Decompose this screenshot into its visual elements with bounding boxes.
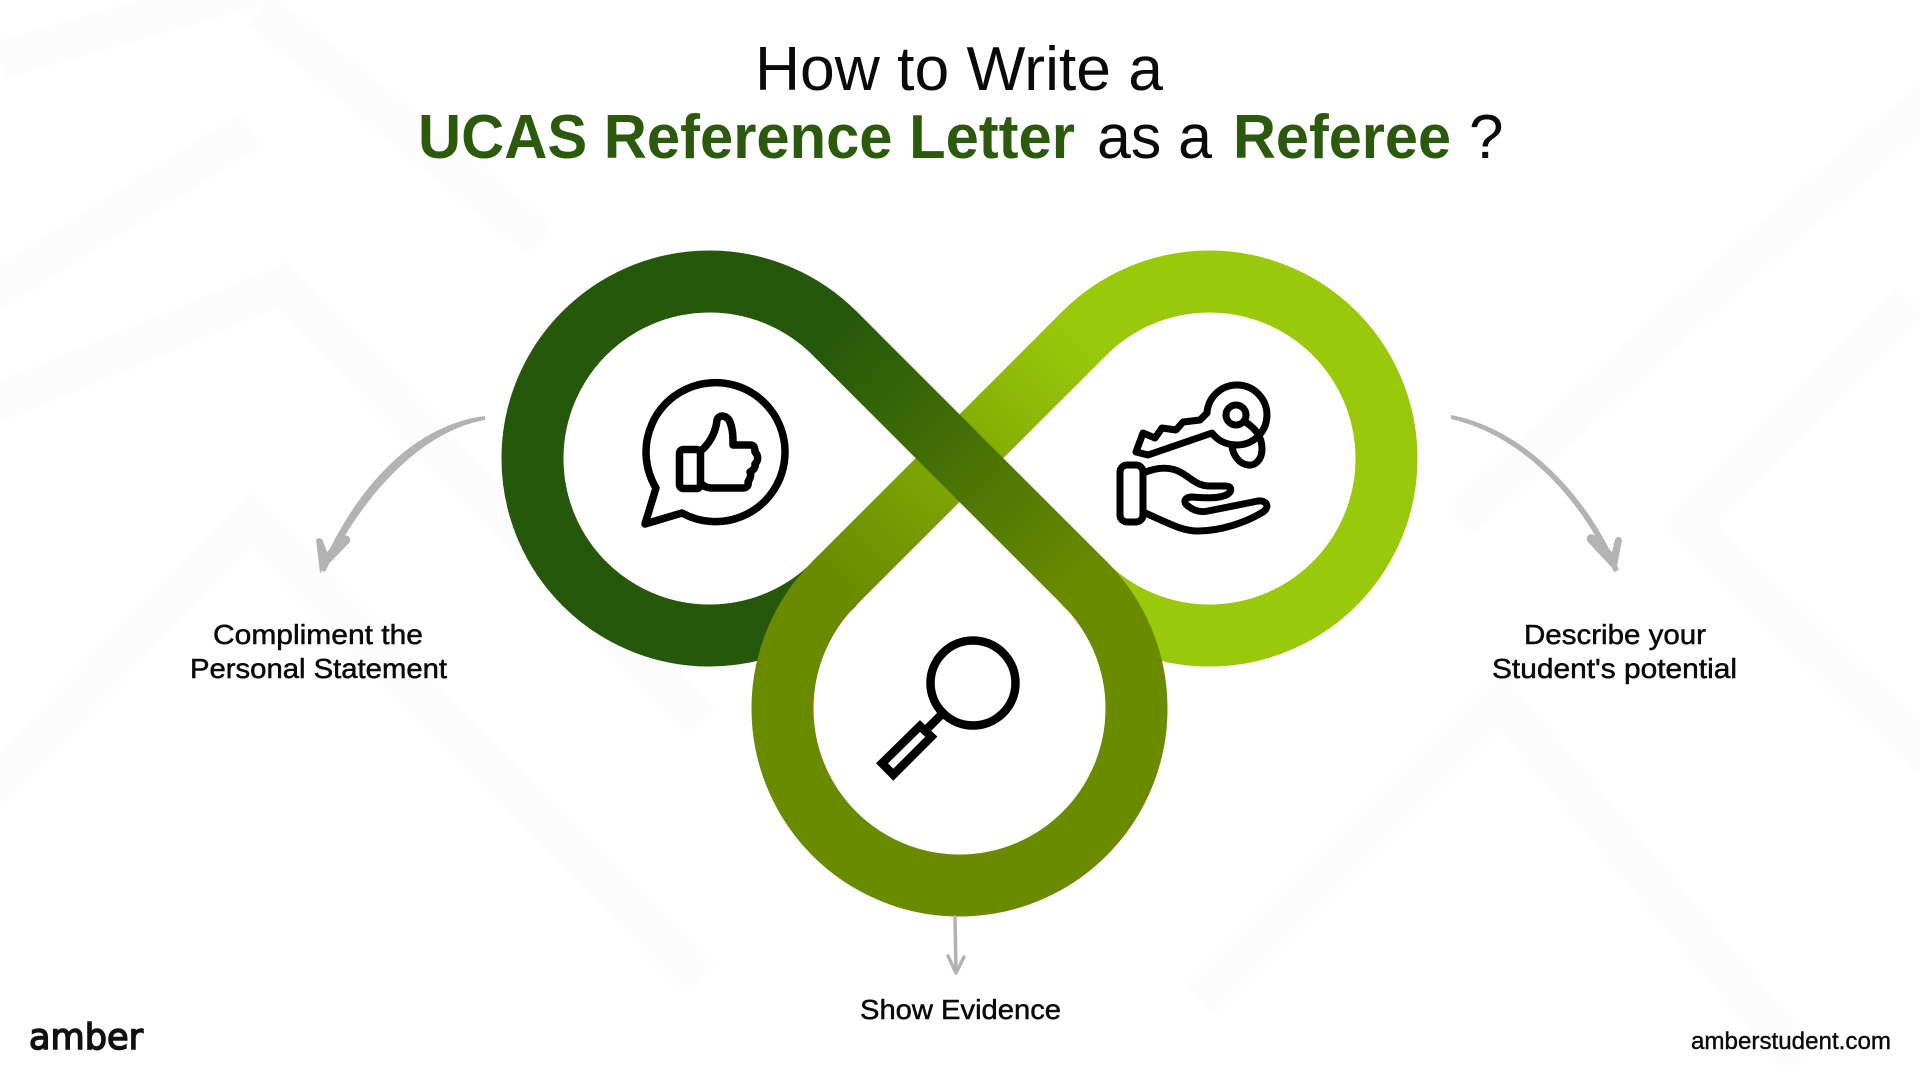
bottom loop <box>783 580 1136 885</box>
title line 2: UCAS Reference Letter <box>418 103 1075 172</box>
title line 2 <box>418 103 1503 172</box>
icon: hand receiving key <box>1120 385 1267 531</box>
icon: magnifying glass <box>882 640 1016 775</box>
label: show evidence: Show Evidence <box>860 994 1061 1025</box>
title line 2: Referee <box>1233 103 1451 172</box>
label: describe your student's potential <box>1492 619 1737 684</box>
icon: thumbs up speech bubble <box>645 383 785 524</box>
infinity-style three loop diagram <box>533 281 1386 885</box>
label: compliment the personal statement: Personal Statement <box>190 653 447 684</box>
right loop <box>1081 281 1386 636</box>
arrow: to left label <box>316 416 485 573</box>
title line 2: ? <box>1469 103 1503 172</box>
label: compliment the personal statement <box>190 619 447 684</box>
label: compliment the personal statement: Compliment the <box>213 619 423 650</box>
title line 2: as a <box>1097 103 1212 172</box>
website url: amberstudent.com <box>1691 1028 1891 1055</box>
title <box>418 35 1503 172</box>
label: describe your student's potential: Student's potential <box>1492 653 1737 684</box>
arrow: to bottom label <box>948 917 964 973</box>
logo: amber: amber <box>29 1017 143 1058</box>
label: describe your student's potential: Describe your <box>1524 619 1706 650</box>
arrow: to right label <box>1451 415 1622 572</box>
left loop <box>533 281 838 636</box>
dark diagonal band <box>835 333 1085 583</box>
light diagonal band <box>834 333 1084 583</box>
title line 1: How to Write a <box>755 35 1164 104</box>
